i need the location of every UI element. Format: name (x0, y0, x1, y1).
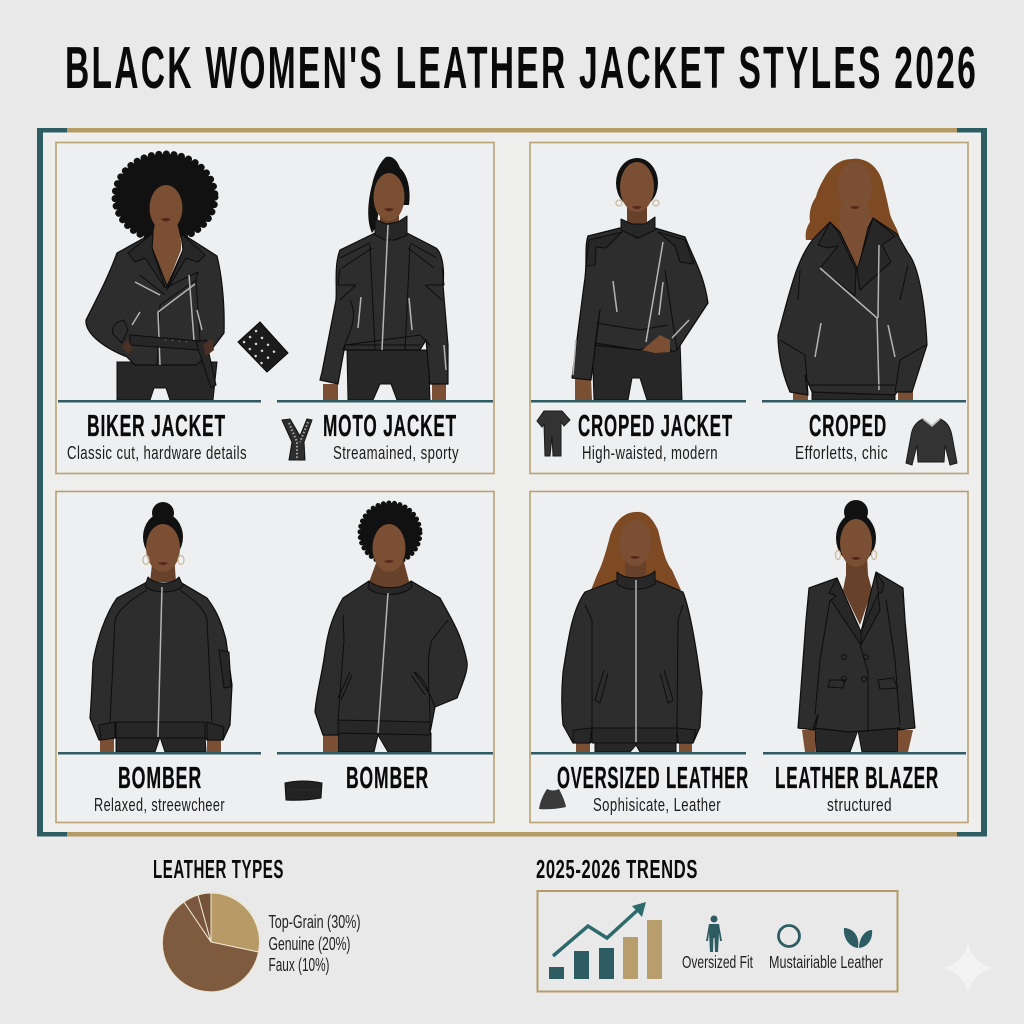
figure: bomber one (90, 502, 232, 752)
label: moto jacket (323, 408, 459, 463)
label: biker jacket (67, 408, 247, 463)
label: bomber: BOMBER (346, 760, 429, 795)
jacket body (778, 218, 927, 395)
label: cropped jacket (578, 408, 733, 463)
icon: sparkle watermark (944, 944, 992, 992)
icon: sweater (906, 419, 957, 465)
label: sustainable leather: Mustairiable Leather (769, 952, 883, 972)
icon: jumpsuit (537, 411, 570, 456)
figure: bomber two (315, 503, 467, 752)
legend: leather types (268, 912, 360, 975)
label: cropped jacket: High-waisted, modern (582, 442, 718, 463)
jacket body (90, 582, 232, 740)
panel: bombers (56, 492, 494, 822)
bar chart: growth (549, 920, 662, 979)
label: bomber relaxed: BOMBER (118, 760, 202, 795)
label: oversized leather: OVERSIZED LEATHER (557, 760, 749, 795)
label: cropped jacket: CROPED JACKET (578, 408, 733, 443)
figure: cropped jacket (572, 158, 708, 400)
label: croped: CROPED (809, 408, 887, 443)
divider lines (58, 400, 493, 402)
label: oversized fit: Oversized Fit (682, 952, 753, 972)
panel: trends (538, 891, 898, 992)
jacket body (86, 233, 224, 365)
legend: leather types: Top-Grain (30%) (268, 912, 360, 932)
panel: oversized and blazer (530, 492, 968, 822)
arrow: upward trend (553, 902, 646, 956)
icon: zipper (282, 419, 312, 460)
icon: leaf (844, 928, 872, 948)
label: leather blazer: structured (827, 794, 892, 815)
figure: leather blazer (798, 500, 915, 752)
jacket body (315, 581, 467, 735)
label: oversized leather: Sophisicate, Leather (593, 794, 721, 815)
label: croped (795, 408, 888, 463)
figure: moto jacket (320, 157, 448, 400)
jacket body (572, 228, 708, 380)
divider lines (531, 752, 966, 754)
divider lines (58, 752, 493, 754)
figure: oversized biker jacket (778, 159, 927, 400)
icon: leather swatch (539, 789, 566, 809)
icon: studded leather patch (238, 322, 288, 372)
jacket body (562, 580, 702, 743)
jacket body (798, 572, 915, 732)
label: moto jacket: Streamained, sporty (333, 442, 459, 463)
icon: ribbed band (285, 781, 322, 800)
pie chart: leather types (162, 893, 260, 992)
heading: leather types: LEATHER TYPES (153, 856, 284, 884)
panel: biker and moto (56, 142, 494, 474)
label: biker jacket: Classic cut, hardware details (67, 442, 247, 463)
heading: trends: 2025-2026 TRENDS (536, 856, 698, 884)
label: leather blazer (775, 760, 939, 815)
label: croped: Efforletts, chic (795, 442, 888, 463)
label: biker jacket: BIKER JACKET (87, 408, 226, 443)
main frame (37, 128, 987, 836)
icon: person (706, 916, 722, 952)
legend: leather types: Genuine (20%) (268, 934, 350, 954)
panel: cropped jackets (530, 142, 968, 474)
divider lines (531, 400, 966, 402)
label: moto jacket: MOTO JACKET (323, 408, 457, 443)
icon: ring (778, 926, 800, 946)
label: oversized leather (557, 760, 749, 815)
figure: oversized leather (562, 512, 702, 752)
legend: leather types: Faux (10%) (268, 955, 330, 975)
label: bomber relaxed (94, 760, 225, 815)
jacket body (320, 233, 448, 384)
figure: biker jacket (86, 154, 224, 400)
label: bomber relaxed: Relaxed, streewcheer (94, 794, 225, 815)
